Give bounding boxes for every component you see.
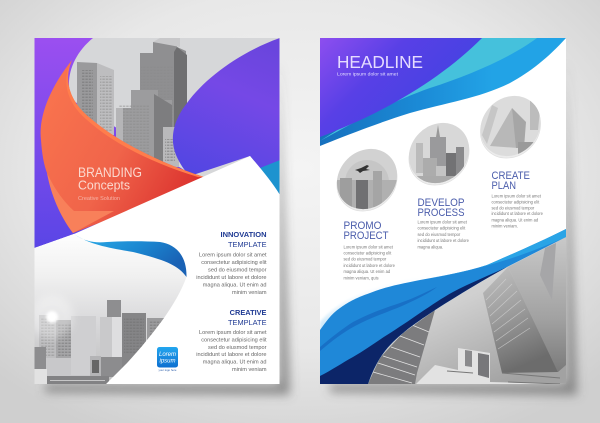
text block: creative template: consectetur adipisicing elit xyxy=(201,338,267,344)
panel: front cover xyxy=(30,38,280,385)
text block: promo project: incididunt ut labore et dolore xyxy=(344,263,396,268)
text block: develop process: magna aliqua. xyxy=(418,244,443,250)
cover photo: skyline xyxy=(69,38,280,180)
text block: create plan: magna aliqua. Ut enim ad xyxy=(492,218,539,222)
cover title: BRANDING xyxy=(78,164,142,180)
text block: develop process: DEVELOP xyxy=(418,197,464,209)
text block: creative template: TEMPLATE xyxy=(228,318,267,327)
text block: promo project: magna aliqua. Ut enim ad xyxy=(344,269,391,274)
cover title: Concepts xyxy=(78,178,130,192)
icon: plane xyxy=(355,165,370,173)
text block: create plan: PLAN xyxy=(492,180,516,192)
text block: innovation template: sed do eiusmod tempor xyxy=(208,268,267,274)
text block: develop process: incididunt ut labore et dolore xyxy=(418,238,470,243)
text block: create plan: sed do eiusmod tempor xyxy=(492,206,535,210)
logo: your logo here xyxy=(159,368,177,372)
teal band xyxy=(320,38,537,141)
text block: creative template: Lorem ipsum dolor sit amet xyxy=(199,330,267,336)
text block: create plan: Lorem ipsum dolor sit amet xyxy=(492,194,542,198)
logo xyxy=(157,347,178,372)
logo: ipsum xyxy=(159,358,176,364)
text block: promo project: sed do eiusmod tempor xyxy=(344,256,387,262)
teal wedge xyxy=(260,160,280,195)
text block: innovation template: INNOVATION xyxy=(221,230,266,239)
text block: innovation template: consectetur adipisicing elit xyxy=(201,260,267,266)
text block: develop process: consectetur adipisicing elit xyxy=(418,226,466,230)
text block: create plan: incididunt ut labore et dolore xyxy=(492,211,544,216)
text block: creative template xyxy=(196,308,267,373)
text block: innovation template xyxy=(196,230,267,296)
swoosh glow xyxy=(320,292,370,330)
blue swoosh xyxy=(320,229,566,384)
text block: creative template: sed do eiusmod tempor xyxy=(208,345,267,351)
headline: Lorem ipsum dolor sit amet xyxy=(337,72,399,78)
text block: create plan: consectetur adipisicing elit xyxy=(492,200,540,204)
text block: promo project xyxy=(344,220,396,280)
text block: create plan xyxy=(492,170,544,228)
text block: promo project: PROMO xyxy=(344,220,382,232)
blue swoosh xyxy=(74,234,187,277)
text block: innovation template: minim veniam xyxy=(232,290,267,296)
text block: creative template: magna aliqua. Ut enim ad xyxy=(203,360,266,366)
orange lower fold xyxy=(47,173,114,233)
photo circle: create xyxy=(480,96,541,158)
blue header band xyxy=(320,38,566,146)
text block: develop process: Lorem ipsum dolor sit amet xyxy=(418,220,468,224)
navy swoosh xyxy=(320,267,507,384)
text block: create plan: CREATE xyxy=(492,170,530,182)
text block: develop process: PROCESS xyxy=(418,207,464,219)
panel: inside page xyxy=(320,38,566,385)
dark sliver xyxy=(320,287,437,351)
cover title xyxy=(78,164,142,202)
text block: innovation template: incididunt ut labore et dolore xyxy=(196,275,266,281)
text block: promo project: Lorem ipsum dolor sit amet xyxy=(344,244,394,250)
text block: innovation template: TEMPLATE xyxy=(228,240,267,249)
text block: innovation template: magna aliqua. Ut enim ad xyxy=(203,282,266,288)
text block: creative template: incididunt ut labore et dolore xyxy=(196,352,266,358)
text block: develop process xyxy=(418,197,470,250)
text block: develop process: sed do eiusmod tempor xyxy=(418,232,461,237)
lower skyline photo xyxy=(30,230,189,385)
text block: promo project: PROJECT xyxy=(344,230,389,242)
photo circle: promo xyxy=(336,148,398,212)
purple header band xyxy=(320,38,482,137)
orange highlight xyxy=(66,60,204,177)
page shadows xyxy=(45,60,577,395)
text block: create plan: minim veniam. xyxy=(492,224,518,228)
text block: promo project: consectetur adipisicing elit xyxy=(344,250,392,256)
text block: innovation template: Lorem ipsum dolor sit amet xyxy=(199,252,267,258)
purple shape xyxy=(172,38,280,174)
photo circle: develop xyxy=(408,123,470,186)
logo: Lorem xyxy=(159,352,176,358)
lower photo xyxy=(360,235,566,385)
text block: creative template: CREATIVE xyxy=(230,308,267,317)
white flap xyxy=(34,156,280,248)
orange swoosh xyxy=(41,60,204,233)
purple corner background xyxy=(34,38,280,248)
text block: creative template: minim veniam xyxy=(232,367,267,373)
headline: HEADLINE xyxy=(337,52,423,72)
text block: promo project: minim veniam, quis xyxy=(344,276,379,280)
bright blue upper band xyxy=(430,229,566,278)
cover title: Creative Solution xyxy=(78,196,120,202)
